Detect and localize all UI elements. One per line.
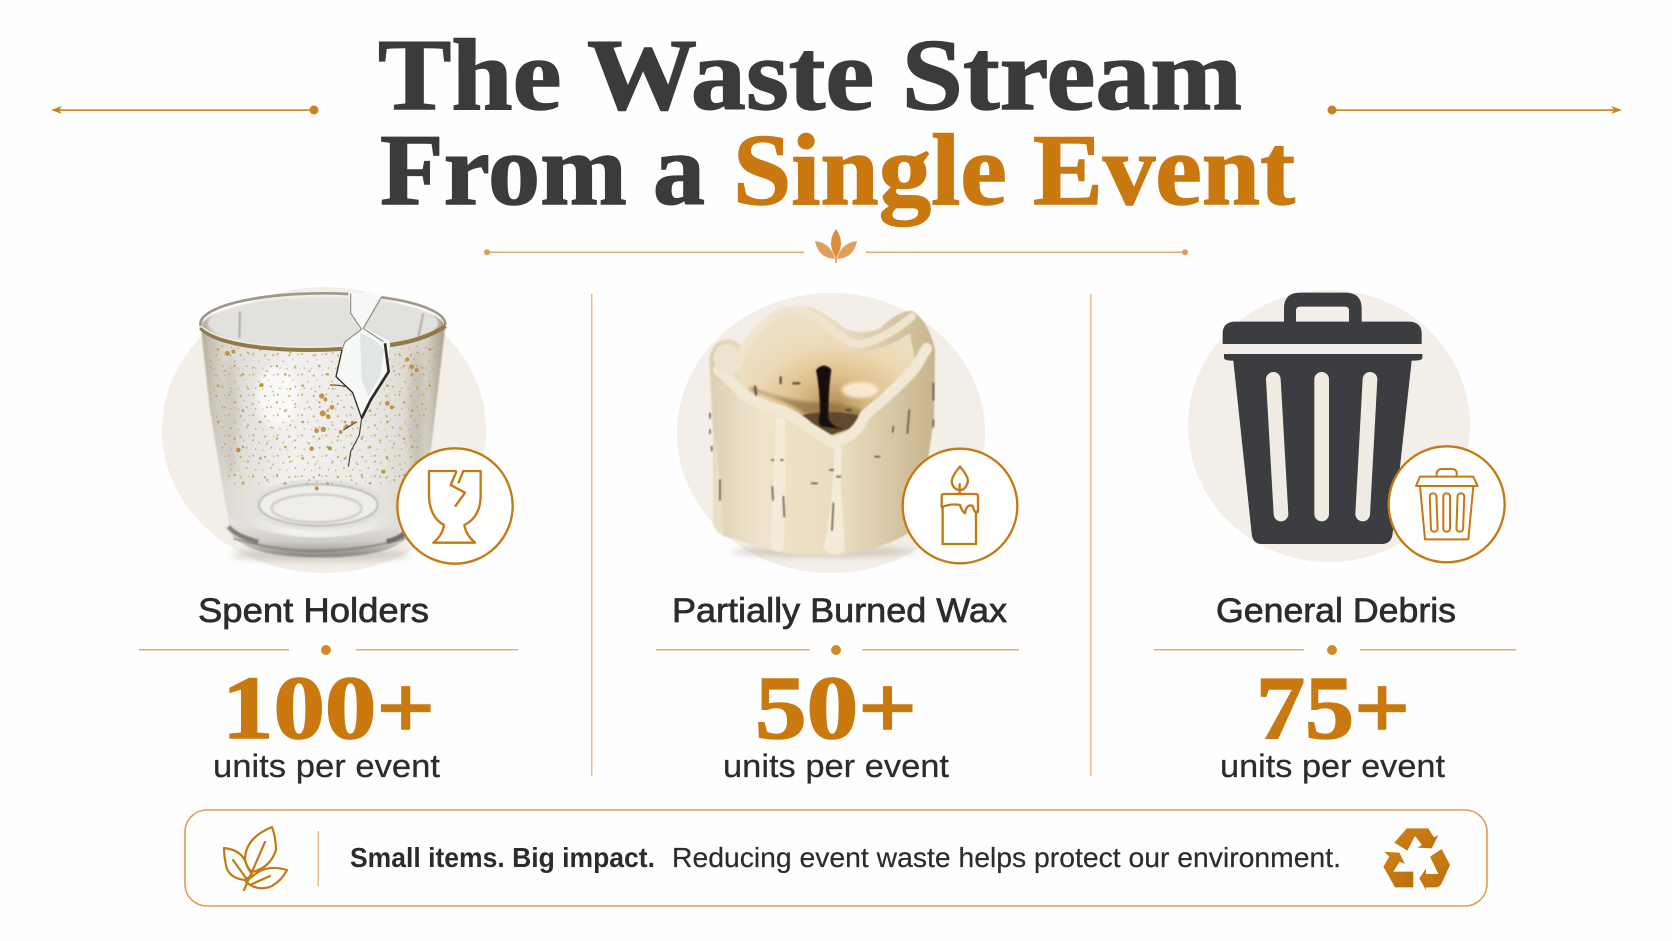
left title ornament [51,106,318,114]
stat divider [1154,645,1516,655]
stat unit: units per event [723,748,949,784]
icon: leaves [224,827,287,890]
wax bowl [737,315,915,437]
backdrop circle [1188,290,1470,562]
badge: broken glass icon [397,448,513,564]
rim [200,293,348,326]
photo: melted candle [709,306,935,556]
stat divider [139,645,518,655]
backdrop circle [162,287,486,573]
badge: candle icon [903,449,1017,563]
title: From a [380,114,705,227]
title [378,19,1295,227]
photo: cracked glass holder [197,291,450,562]
gold specks [210,344,436,485]
message: Reducing event waste helps protect our environment. [672,842,1341,873]
wick [816,366,843,429]
right title ornament [1328,106,1622,114]
rolled wax lip [718,348,927,443]
stat unit: units per event [213,748,440,784]
callout border [185,810,1487,906]
title: The Waste Stream [378,19,1242,132]
cracked shard [337,291,390,417]
stat value: 50+ [755,659,917,758]
label: Partially Burned Wax [672,592,1007,630]
stat value: 75+ [1256,659,1410,758]
column divider [1090,294,1092,776]
label: General Debris [1216,592,1456,630]
backdrop circle [677,293,985,573]
wax drips [770,417,786,551]
label: Spent Holders [198,592,429,630]
bold message: Small items. Big impact. [350,842,655,873]
panel: spent holders [139,287,518,784]
stat divider [656,645,1019,655]
panel: partially burned wax [656,293,1019,784]
stat value: 100+ [222,659,435,758]
divider [318,831,319,886]
title divider with leaf [484,229,1188,263]
panel: general debris [1154,290,1516,784]
stat unit: units per event [1220,748,1445,784]
callout bar [185,810,1487,906]
badge: outline trash icon [1389,446,1505,562]
title: Single Event [733,114,1295,227]
icon: recycle [1383,828,1450,890]
illustration: dark trash can [1223,293,1422,544]
column divider [591,294,592,776]
